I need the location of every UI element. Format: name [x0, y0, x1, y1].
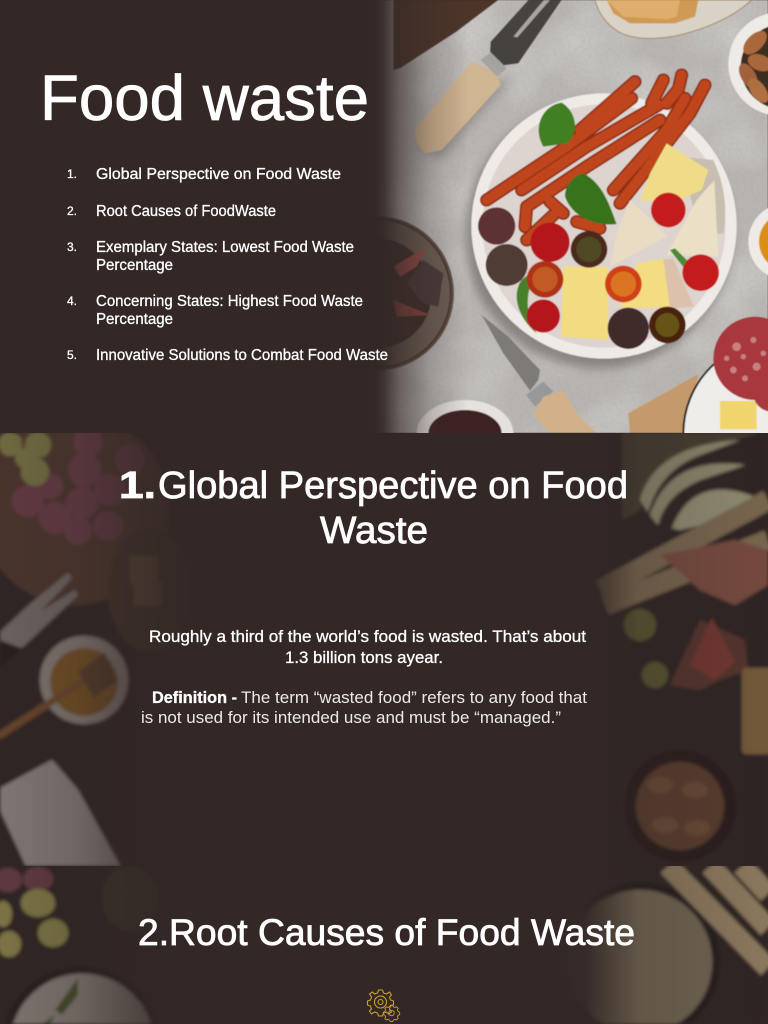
dimmed food photo background	[0, 866, 768, 1024]
breadsticks	[600, 500, 768, 605]
agenda list	[67, 166, 388, 364]
dimmed food photo background	[0, 415, 768, 866]
fork	[0, 572, 79, 650]
soft cheese wedge	[0, 760, 120, 866]
jam bowl	[416, 400, 514, 433]
wooden cutting board	[628, 374, 698, 433]
statistic text: 1.3 billion tons ayear.	[285, 649, 443, 667]
dark overlay	[0, 433, 768, 866]
dark left panel	[0, 0, 462, 433]
definition text: The term “wasted food” refers to any food that	[241, 689, 587, 707]
item 5: 5.	[67, 348, 77, 362]
item 2: 2.	[67, 204, 77, 218]
honey bowl	[748, 203, 768, 280]
sausages	[487, 75, 705, 240]
prosciutto	[660, 540, 768, 605]
cracker dish	[595, 0, 752, 38]
item 3: Exemplary States: Lowest Food Waste	[96, 239, 354, 256]
item 1: Global Perspective on Food Waste	[96, 166, 341, 183]
heading: 2.Root Causes of Food Waste	[138, 912, 635, 953]
left ceramic plate with figs	[381, 217, 454, 370]
item 5	[67, 348, 388, 360]
title: Food waste	[40, 62, 369, 134]
item 4: Concerning States: Highest Food Waste	[96, 293, 363, 310]
main plate	[471, 93, 737, 359]
cheese pieces	[561, 143, 718, 340]
wooden board	[393, 0, 498, 70]
cream bowl	[560, 882, 720, 1024]
item 3: Percentage	[96, 257, 173, 274]
definition text: Definition -	[152, 689, 237, 707]
salami plate	[682, 316, 768, 433]
item 4: 4.	[67, 294, 77, 308]
definition text	[141, 689, 587, 727]
cheese fork	[415, 0, 562, 153]
white herb bowl	[5, 966, 159, 1024]
almond bowl	[634, 760, 726, 852]
panel: global perspective	[0, 415, 768, 866]
grapes	[0, 867, 68, 957]
item 5: Innovative Solutions to Combat Food Waste	[96, 347, 388, 364]
grape basket	[0, 433, 152, 606]
item 3: 3.	[67, 240, 77, 254]
breadsticks	[668, 866, 768, 968]
tomatoes	[478, 193, 719, 349]
honey bowl with dipper	[0, 636, 128, 735]
statistic text: Roughly a third of the world’s food is wasted. That’s about	[149, 628, 586, 646]
panel: title slide	[44, 0, 768, 433]
pear slices	[622, 433, 768, 530]
knife	[482, 315, 597, 433]
small dark bowl	[102, 866, 158, 930]
dark overlay	[0, 866, 768, 1024]
item 2	[67, 204, 276, 216]
definition text: is not used for its intended use and must be “managed.”	[141, 709, 561, 727]
basil leaves	[517, 103, 705, 333]
item 2: Root Causes of FoodWaste	[96, 203, 276, 220]
shadow under fork	[426, 76, 511, 161]
item 1: 1.	[67, 167, 77, 181]
heading: Global Perspective on Food	[158, 465, 628, 507]
heading: Waste	[320, 510, 428, 552]
item 4	[67, 293, 363, 328]
item 4: Percentage	[96, 311, 173, 328]
panel: root causes	[0, 866, 768, 1024]
photo: food platter on grey stone	[380, 0, 768, 433]
fig and grapes	[624, 609, 748, 690]
almond bowl	[728, 12, 768, 116]
shadow under main plate	[465, 102, 732, 368]
wooden dish with cheese cubes	[110, 559, 162, 636]
heading	[119, 465, 628, 552]
heading: 1.	[119, 465, 156, 507]
statistic text	[149, 628, 586, 667]
icon: gears	[368, 990, 400, 1022]
item 3	[67, 239, 354, 274]
cracker	[742, 668, 768, 754]
